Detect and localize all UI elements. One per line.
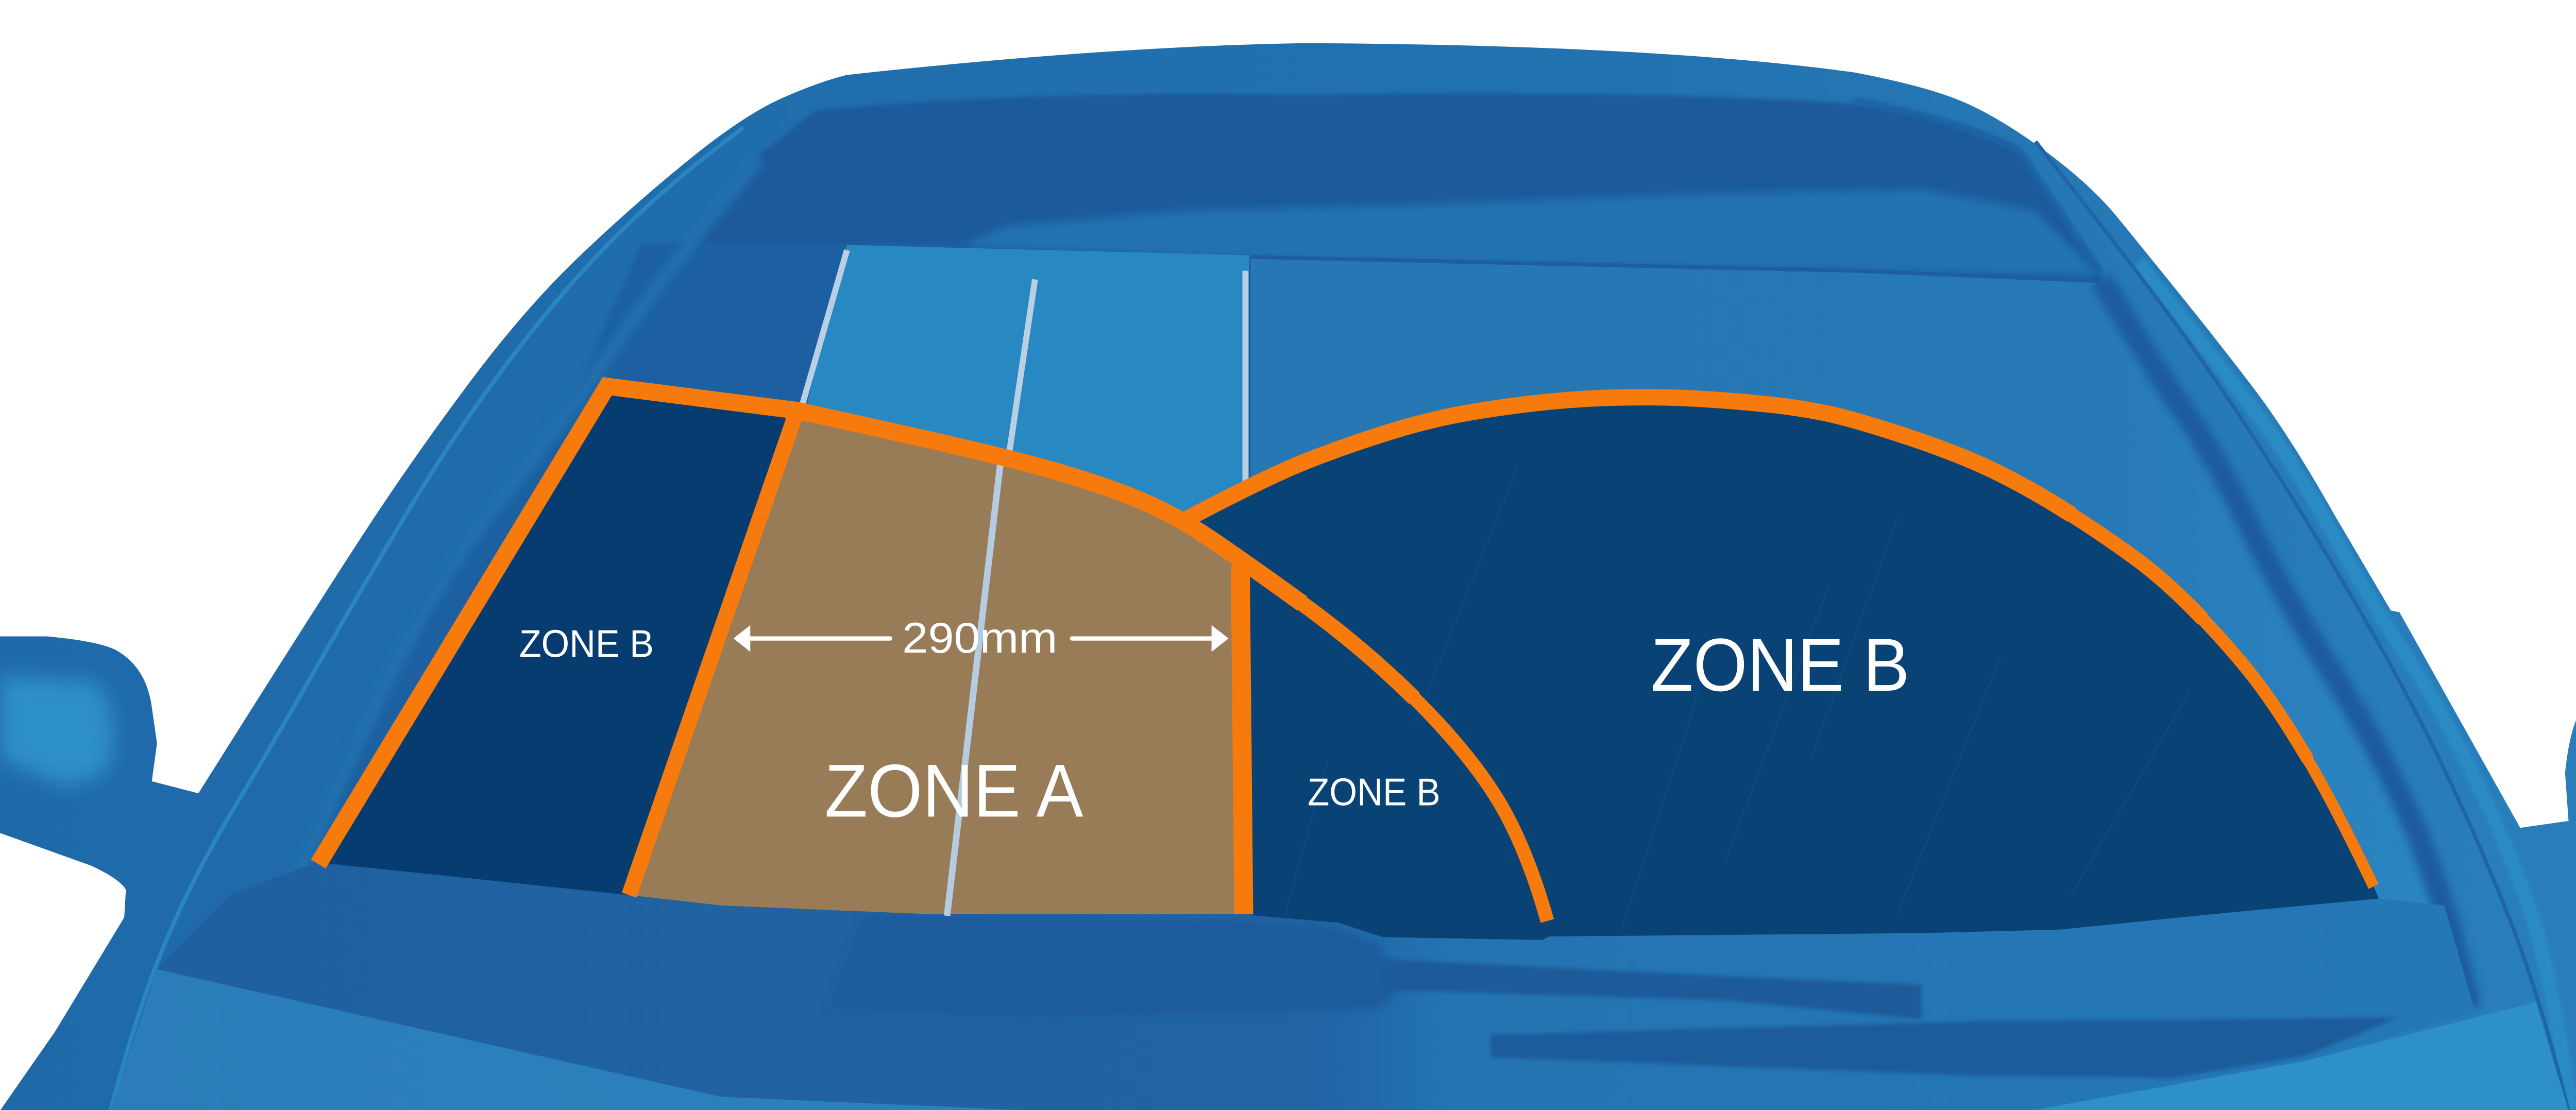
central dark cowl blob (828, 914, 1397, 1017)
zone A (630, 411, 1245, 914)
orange zone A right line (1240, 566, 1244, 914)
label: 290mm: 290mm (902, 613, 1057, 662)
road lines (802, 250, 1245, 549)
top reflection band (959, 190, 2101, 276)
hood left (110, 969, 1035, 1110)
orange zone A left line (629, 411, 797, 895)
left mirror highlight (0, 676, 113, 787)
dimension arrow left (734, 626, 890, 651)
right pillar shading (1854, 100, 2572, 1110)
wiper (1380, 959, 1922, 1019)
cowl below windscreen (157, 864, 2476, 1110)
label: zone B left: ZONE B (519, 622, 654, 665)
orange zone B arc (1183, 397, 2374, 886)
orange outline: zone A boundary arc and left edge (318, 386, 1547, 921)
zone B left (317, 386, 797, 895)
lower dark band (1490, 1017, 2398, 1078)
label: zone A: ZONE A (824, 748, 1083, 832)
zone B right and middle (1187, 397, 2379, 940)
header line (1250, 257, 2101, 281)
left pillar shading (110, 128, 759, 1110)
road (802, 245, 1249, 569)
dimension arrow right (1072, 626, 1228, 651)
label: zone B middle: ZONE B (1308, 771, 1440, 814)
left glass panel (293, 243, 966, 880)
road line through zone A (947, 462, 1001, 916)
right glass panel (1250, 255, 2444, 945)
label: zone B right: ZONE B (1651, 623, 1909, 707)
hood right (2030, 1002, 2568, 1110)
rain streaks (1285, 466, 2191, 931)
windscreen glass (229, 93, 2444, 945)
